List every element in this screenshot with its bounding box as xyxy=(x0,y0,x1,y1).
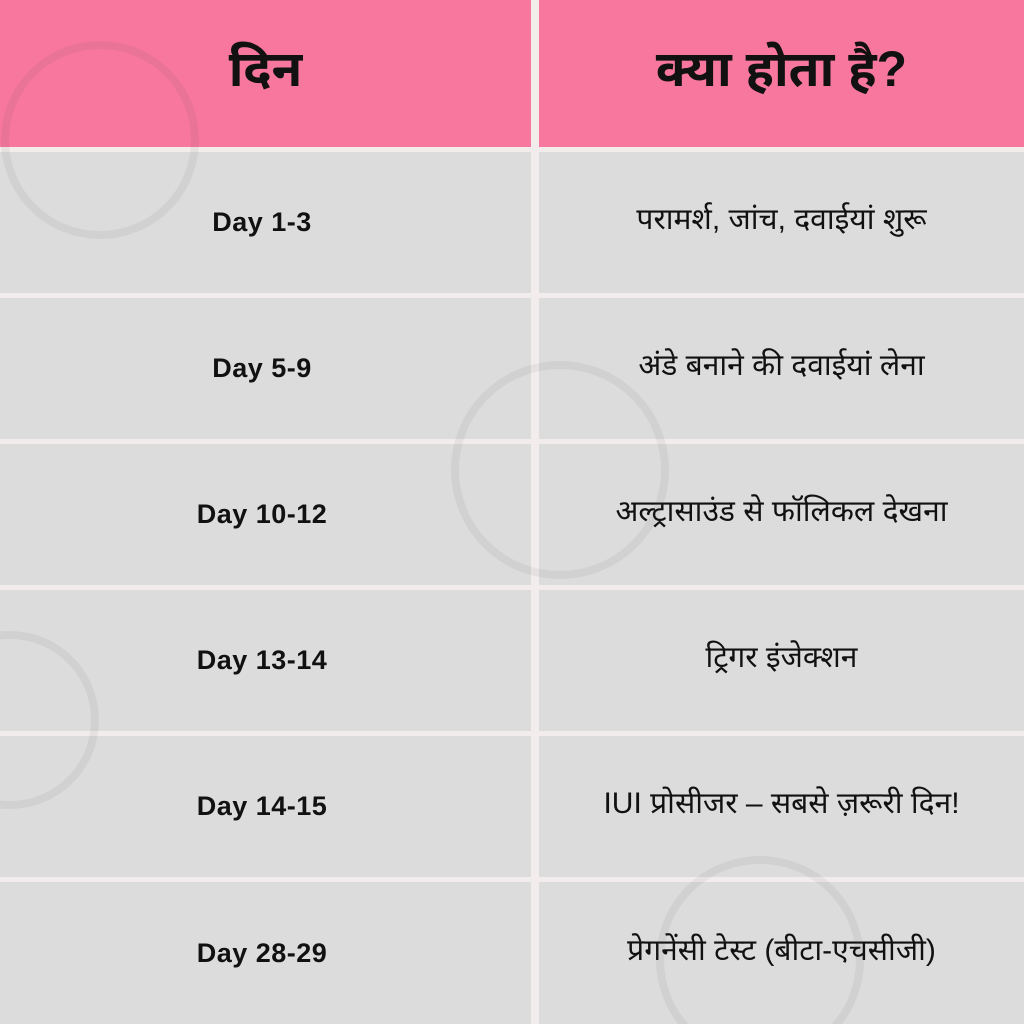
row 3 day: Day 10-12 xyxy=(197,499,327,529)
row 1 day: Day 1-3 xyxy=(212,207,312,237)
row 4 day: Day 13-14 xyxy=(197,645,327,675)
row 6 day xyxy=(0,882,531,1024)
row 6 text: प्रेगनेंसी टेस्ट (बीटा-एचसीजी) xyxy=(627,934,936,966)
header: day column xyxy=(0,0,531,147)
row 6 text xyxy=(539,882,1024,1024)
row 4 text: ट्रिगर इंजेक्शन xyxy=(706,641,857,674)
row 1 day xyxy=(0,152,531,293)
row 2 text: अंडे बनाने की दवाईयां लेना xyxy=(638,349,925,382)
row 5 text: IUI प्रोसीजर – सबसे ज़रूरी दिन! xyxy=(603,787,960,820)
row 4 day xyxy=(0,590,531,731)
row 2 day xyxy=(0,298,531,439)
row 4 text xyxy=(539,590,1024,731)
row 3 text xyxy=(539,444,1024,585)
row 3 text: अल्ट्रासाउंड से फॉलिकल देखना xyxy=(616,495,948,528)
header: what happens column xyxy=(539,0,1024,147)
row 1 text: परामर्श, जांच, दवाईयां शुरू xyxy=(636,203,927,236)
row 1 text xyxy=(539,152,1024,293)
header: day column: दिन xyxy=(229,41,302,97)
row 5 text xyxy=(539,736,1024,877)
row 5 day xyxy=(0,736,531,877)
row 3 day xyxy=(0,444,531,585)
row 2 text xyxy=(539,298,1024,439)
header: what happens column: क्या होता है? xyxy=(656,41,907,97)
row 2 day: Day 5-9 xyxy=(212,353,312,383)
row 5 day: Day 14-15 xyxy=(197,791,327,821)
row 6 day: Day 28-29 xyxy=(197,938,327,968)
